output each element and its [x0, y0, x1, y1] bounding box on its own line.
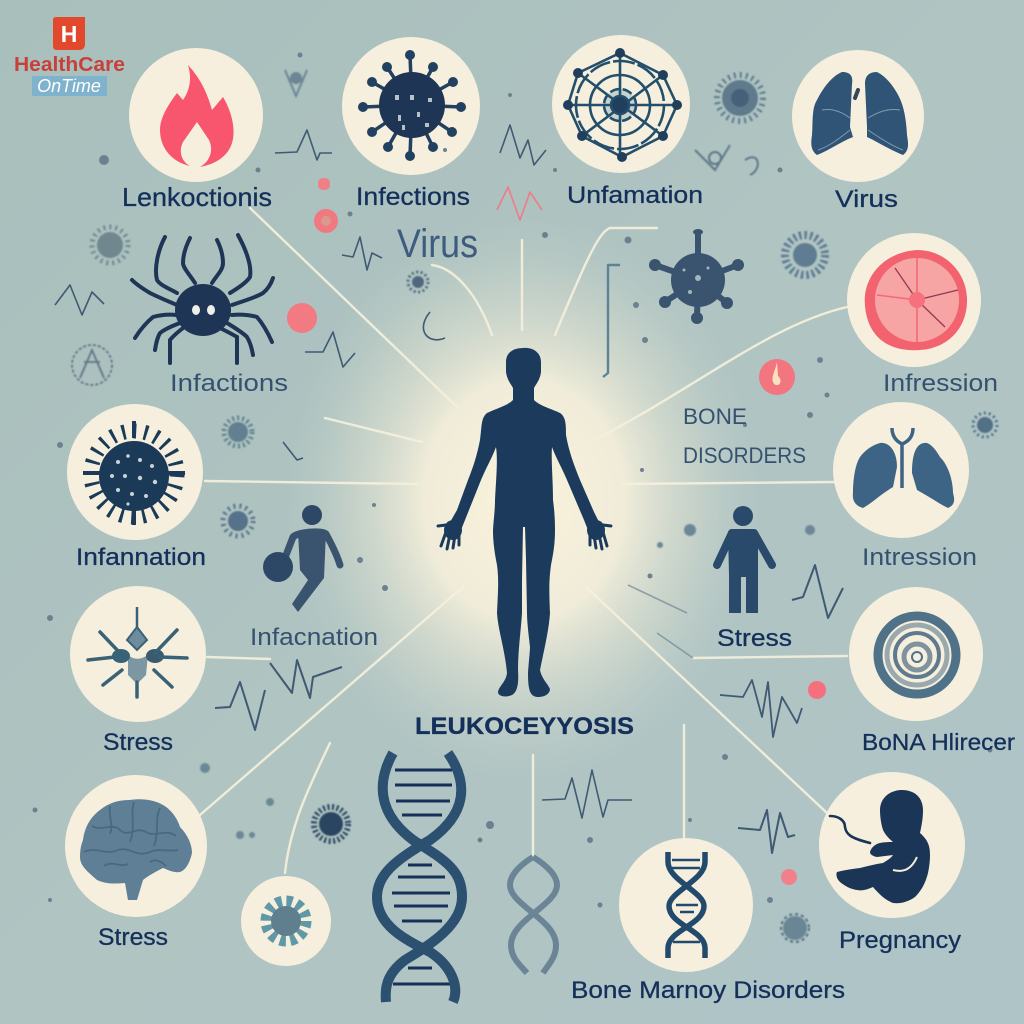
central glow: [284, 215, 764, 785]
label: Bone Disorders: DISORDERS: [683, 443, 806, 468]
icon: lungs: [811, 72, 908, 155]
small viruses: [72, 70, 997, 942]
scattered specks: [32, 52, 992, 908]
icon: brain: [80, 799, 192, 900]
label: Virus center: Virus: [397, 222, 478, 266]
icon: web: [563, 48, 682, 162]
icon: spider: [132, 235, 273, 363]
label: Stress right: Stress: [717, 625, 792, 652]
icon: dna small circle: [668, 852, 705, 958]
label: Infacnation: Infacnation: [250, 624, 378, 651]
label: Lenkoctionis: Lenkoctionis: [122, 182, 272, 212]
logo: OnTime: [37, 76, 101, 96]
logo: H: [61, 21, 77, 47]
logo: [14, 17, 125, 96]
icon: citrus cross-section: [865, 250, 967, 350]
label: Infannation: Infannation: [76, 544, 206, 571]
label: BoNA Hlirecer: BoNA Hlirecer: [862, 729, 1015, 755]
icon: spiral: [878, 616, 956, 694]
icon: fetus: [830, 790, 930, 903]
ecg traces: [55, 125, 843, 853]
icon: virus left: [83, 421, 185, 525]
icon: stress creature: [88, 607, 187, 697]
label: Virus right: Virus: [835, 186, 898, 213]
label: Intression: Intression: [862, 544, 977, 571]
connector lines: [200, 208, 847, 873]
icon: faint dna: [510, 857, 557, 973]
label: Stress mid left: Stress: [103, 729, 173, 756]
label: Infactions: Infactions: [170, 370, 288, 397]
grey connector stubs: [628, 585, 693, 658]
icon: large dna: [377, 753, 462, 1002]
dark spiky virus: [649, 229, 744, 324]
label: Bone Disorders: BONE: [683, 404, 747, 429]
icon: lungs with trachea: [853, 428, 954, 508]
icon: small person right: [717, 506, 772, 613]
icon: flame: [160, 65, 234, 167]
icon: small person left: [263, 505, 340, 612]
label: Infections top: Infections: [356, 183, 470, 211]
label: Pregnancy: Pregnancy: [839, 927, 961, 954]
label: Stress bottom: Stress: [98, 924, 168, 951]
label: Bone Disorders: [683, 404, 806, 468]
icon: small virus bottom: [266, 901, 306, 941]
icon: human figure: [438, 348, 611, 697]
label: Infression: Infression: [883, 370, 998, 397]
title: LEUKOCEYYOSIS: [415, 713, 634, 740]
icon: virus top: [358, 50, 466, 161]
logo: HealthCare: [14, 54, 125, 76]
label: Bone Marrow Disorders: Bone Marnoy Disorders: [571, 977, 845, 1004]
pink accent dots: [287, 178, 826, 885]
label: Unfamation: Unfamation: [567, 182, 703, 209]
